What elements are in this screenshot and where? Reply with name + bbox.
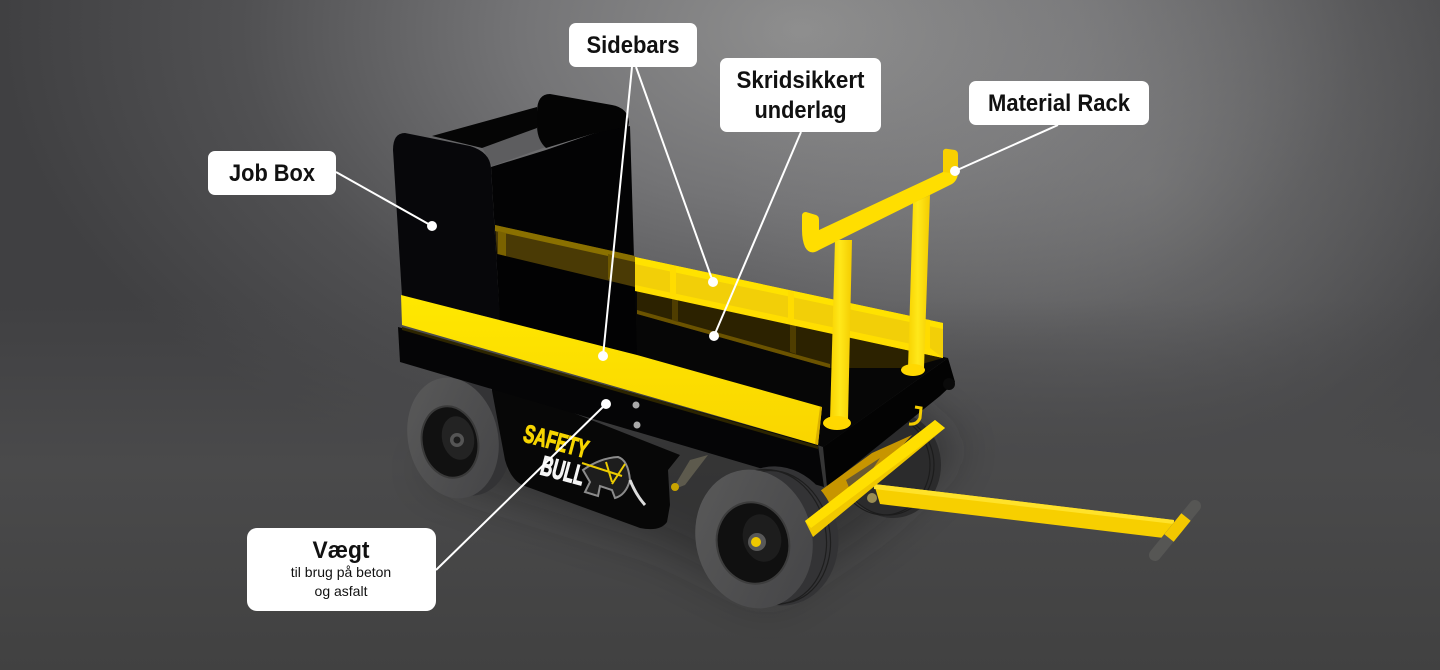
rear right wheel [838,412,941,518]
job box rear panel [432,94,629,148]
front rail [401,295,822,445]
logo: Safety Bull: SAFETY [521,420,591,463]
cross bar [805,420,945,537]
label: Vægt: Vægt [312,537,370,564]
label: Vægt [247,528,436,611]
material rack [802,149,958,430]
back sidebar [635,257,943,358]
label: Job Box [208,151,336,195]
deck [497,255,948,447]
job box top opening [482,128,546,166]
label: Skridsikkert underlag: Skridsikkert [736,67,864,94]
deck reflection [637,291,943,368]
logo: Safety Bull: BULL [537,451,588,492]
tow bar [867,484,1174,539]
front wheel [681,455,851,621]
frame side right [823,358,955,487]
line: sidebar back [636,67,713,282]
label: Sidebars [569,23,697,67]
label: Vægt: og asfalt [315,583,368,599]
label: Skridsikkert underlag: underlag [754,97,846,124]
label: Skridsikkert underlag [720,58,881,132]
label: Sidebars: Sidebars [586,32,680,59]
label: Material Rack [969,81,1149,125]
floor shadow [420,400,960,600]
line: sidebar front [603,67,632,356]
brace behind weight [671,455,708,491]
line: weight [436,404,606,570]
box lower panel [497,254,637,356]
markers [427,166,960,409]
front frame and weight [398,327,824,529]
weight bolts [632,402,640,428]
label: Vægt: til brug på beton [291,564,391,580]
callout lines and markers [336,67,1058,570]
illustration: Safety Bull cart [393,94,1195,621]
rear left wheel [396,369,521,507]
back sidebar through box [495,225,635,287]
label: Material Rack: Material Rack [988,90,1131,117]
line: material rack [955,125,1058,171]
undercarriage [820,435,912,505]
line: job box [336,172,432,226]
job box side panels [393,126,637,356]
label: Job Box: Job Box [229,160,316,187]
line: non-slip deck [714,132,801,336]
handle [1155,506,1195,555]
logo: Safety Bull [521,420,645,505]
